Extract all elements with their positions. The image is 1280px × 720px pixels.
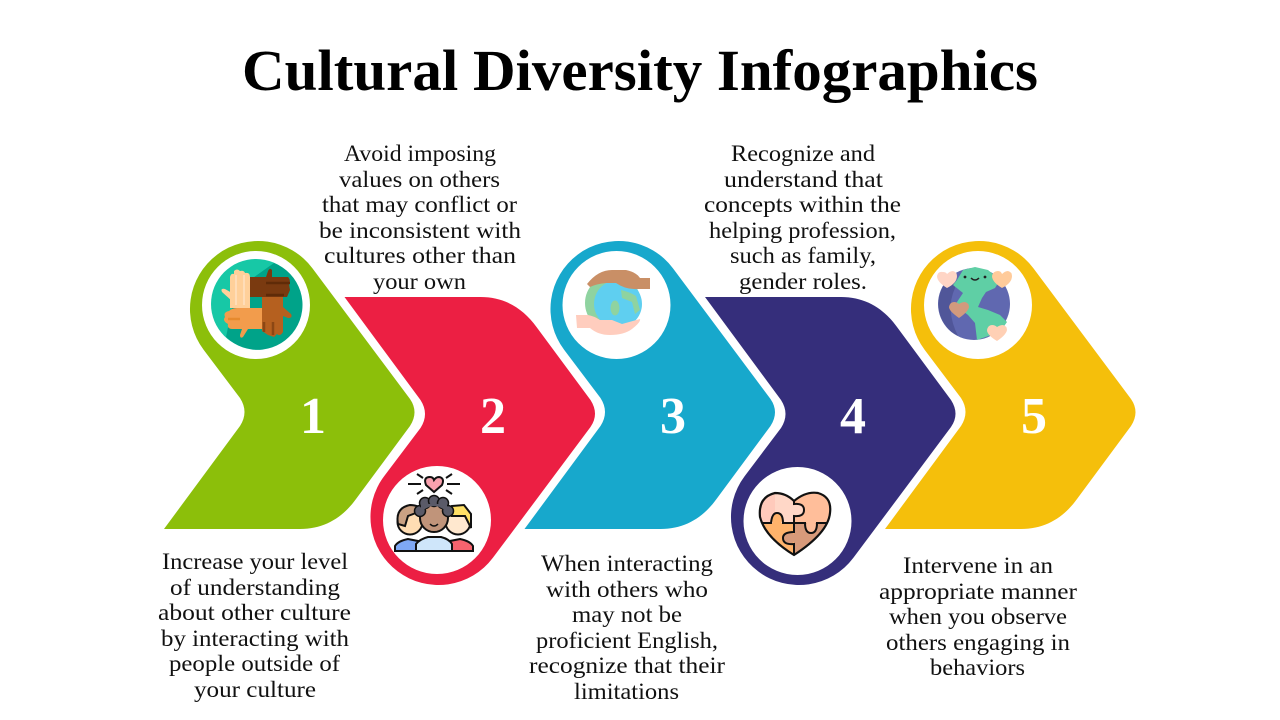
text block 4: understand that [724, 167, 884, 192]
text block 3: with others who [546, 577, 708, 602]
text block 2: cultures other than [324, 243, 517, 268]
icon: four hands [202, 251, 310, 359]
text block 1: your culture [194, 677, 316, 702]
text block 5: behaviors [930, 655, 1025, 680]
text block 3 [529, 551, 725, 704]
text block 2: your own [373, 269, 467, 294]
icon: hands holding globe [562, 251, 670, 359]
icon: group of people with heart [383, 466, 491, 574]
text block 1 [158, 549, 351, 702]
icon: globe with hearts [924, 251, 1032, 359]
title: Cultural Diversity Infographics [242, 38, 1038, 103]
number 4: 4 [840, 388, 866, 445]
text block 4: such as family, [730, 243, 876, 268]
text block 3: limitations [574, 679, 679, 704]
text block 1: of understanding [170, 575, 341, 600]
text block 1: about other culture [158, 600, 351, 625]
arrow 3: blue [524, 241, 775, 529]
number 1: 1 [300, 388, 326, 445]
icon: puzzle heart [744, 467, 852, 575]
text block 2: Avoid imposing [344, 141, 497, 166]
text block 3: may not be [572, 602, 682, 627]
text block 5: when you observe [889, 604, 1067, 629]
text block 2: that may conflict or [322, 192, 517, 217]
number 2: 2 [480, 388, 506, 445]
text block 1: Increase your level [162, 549, 348, 574]
text block 3: When interacting [541, 551, 714, 576]
text block 4: helping profession, [709, 218, 896, 243]
text block 5: appropriate manner [879, 579, 1077, 604]
text block 2: values on others [339, 167, 500, 192]
text block 2 [319, 141, 522, 294]
arrow 4: navy [705, 297, 956, 585]
arrow 1: green [164, 241, 414, 529]
text block 4: concepts within the [704, 192, 901, 217]
number 3: 3 [660, 388, 686, 445]
text block 1: by interacting with [161, 626, 350, 651]
text block 4 [704, 141, 901, 294]
text block 3: proficient English, [536, 628, 718, 653]
text block 5: others engaging in [886, 630, 1071, 655]
arrow 5: yellow [885, 241, 1136, 529]
arrow 2: red [344, 297, 595, 585]
text block 1: people outside of [169, 651, 340, 676]
text block 4: Recognize and [731, 141, 876, 166]
text block 2: be inconsistent with [319, 218, 522, 243]
text block 4: gender roles. [739, 269, 867, 294]
text block 5 [879, 553, 1077, 680]
text block 5: Intervene in an [903, 553, 1054, 578]
text block 3: recognize that their [529, 653, 725, 678]
number 5: 5 [1021, 388, 1047, 445]
